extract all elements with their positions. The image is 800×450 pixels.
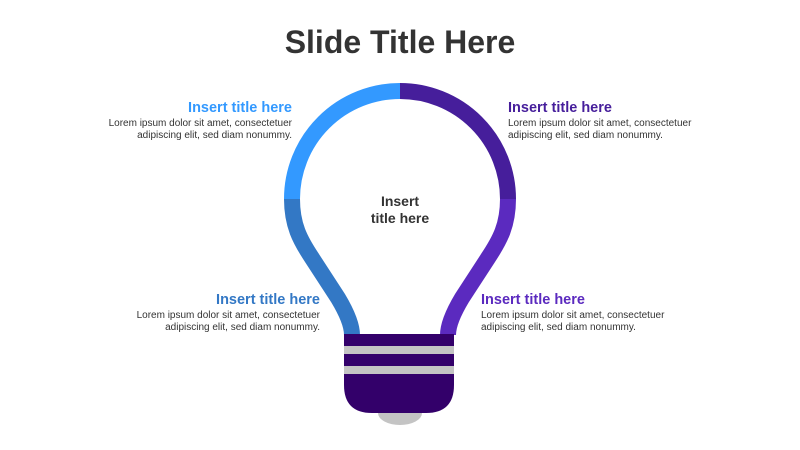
text block: bottom-right: adipiscing elit, sed diam nonummy. [481,322,636,333]
bulb cap [378,401,422,425]
text block: bottom-left: Insert title here [216,292,320,308]
segment: top-right [400,91,508,199]
text block: top-left [109,100,292,141]
text block: bottom-right: Insert title here [481,292,585,308]
bulb base [344,334,454,413]
text block: top-left: Lorem ipsum dolor sit amet, consectetuer [109,118,292,129]
center label [371,193,429,226]
text block: top-right [508,100,692,141]
text block: top-right: Insert title here [508,100,612,116]
text block: top-right: Lorem ipsum dolor sit amet, consectetuer [508,118,691,129]
text block: bottom-right: Lorem ipsum dolor sit amet, consectetuer [481,310,664,321]
segment: lower-left [292,199,352,335]
center label: Insert [381,193,419,209]
text block: top-right: adipiscing elit, sed diam nonummy. [508,130,663,141]
text block: bottom-left [137,292,320,333]
segment: top-left [292,91,400,199]
segment: lower-right [448,199,508,335]
text block: bottom-right [481,292,664,333]
title: Slide Title Here [285,24,515,60]
center label: title here [371,210,429,226]
text block: top-left: adipiscing elit, sed diam nonummy. [137,130,292,141]
text block: bottom-left: Lorem ipsum dolor sit amet, consectetuer [137,310,320,321]
text block: bottom-left: adipiscing elit, sed diam nonummy. [165,322,320,333]
text block: top-left: Insert title here [188,100,292,116]
